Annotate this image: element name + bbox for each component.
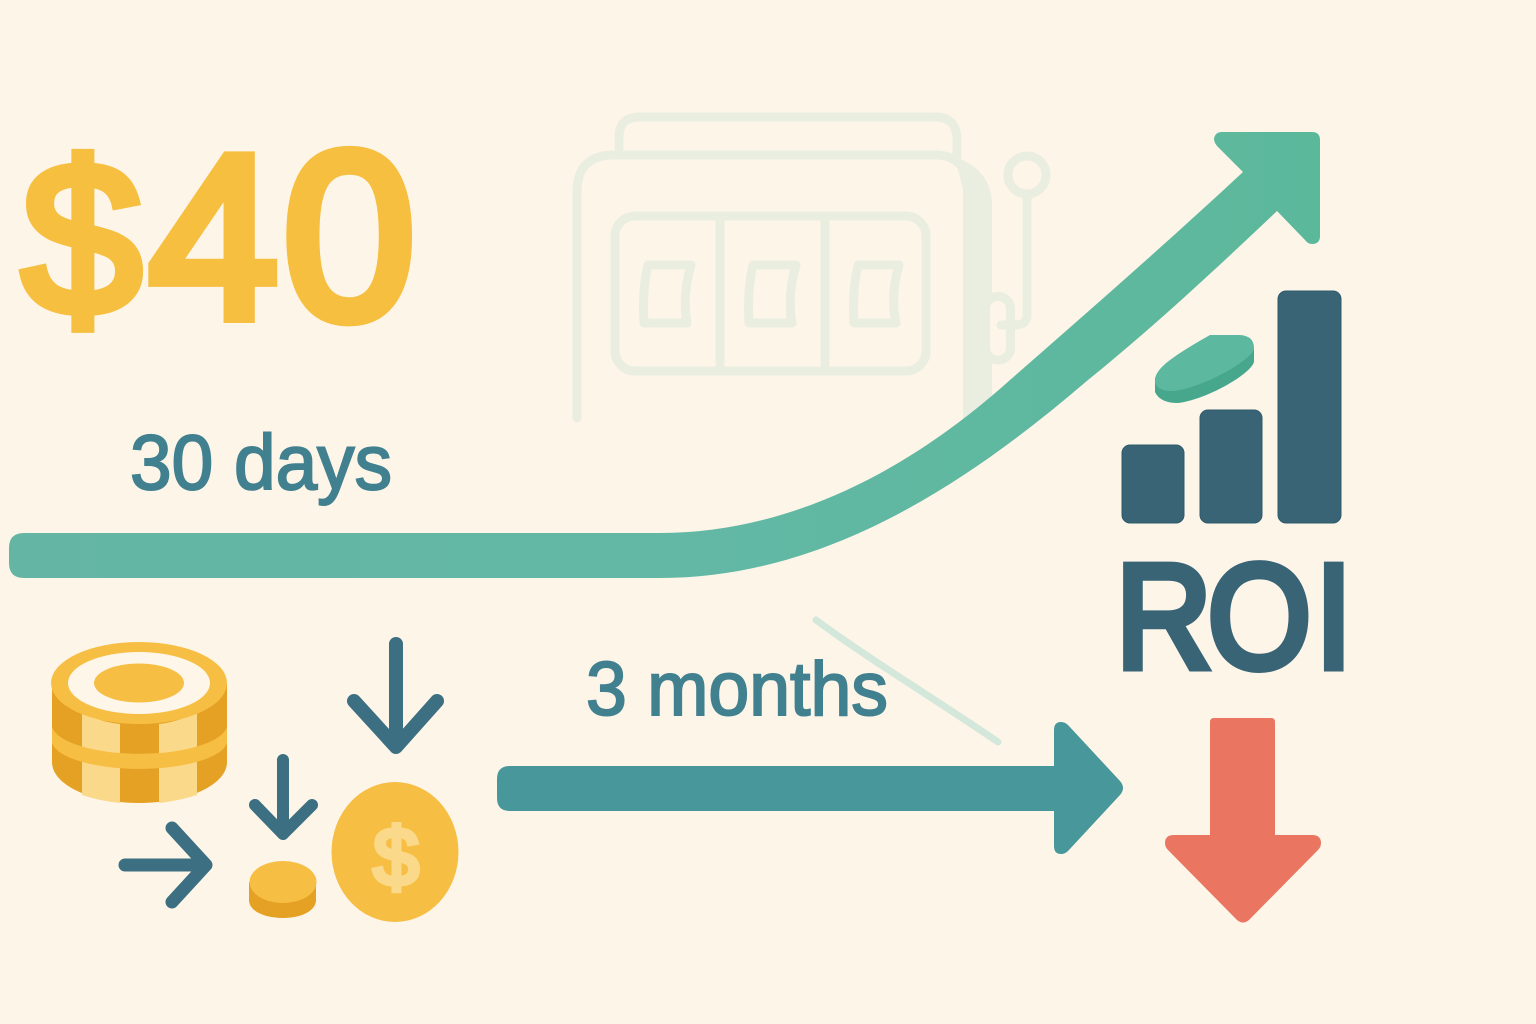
label: ROI: R <box>1116 534 1212 699</box>
arrow: large down arrow <box>354 644 437 747</box>
arrow: small down arrow <box>255 760 312 834</box>
icon: dollar coin: $ <box>373 812 419 903</box>
heading: $40: $ <box>22 118 142 359</box>
arrow: red down arrow <box>1165 718 1321 922</box>
icon: chip stack <box>51 642 227 803</box>
chip middle band <box>52 727 227 769</box>
icon: small coin <box>249 861 316 918</box>
label: 3 months: 3 months <box>586 647 888 732</box>
heading: $40: 4 <box>149 108 278 367</box>
arrow: flat three-month arrow <box>497 722 1123 854</box>
icon: dollar coin <box>332 782 458 922</box>
arrow: small right arrow <box>125 828 206 902</box>
decorative pen stroke behind 3 months <box>816 620 998 742</box>
label: 30 days: 30 days <box>130 418 392 506</box>
label: ROI: I <box>1315 534 1352 699</box>
bar chart: rising bars <box>1122 291 1341 523</box>
label: ROI: O <box>1208 534 1311 699</box>
icon: faint slot machine <box>577 117 1046 440</box>
icon: green tilted chip <box>1155 335 1254 403</box>
arrow: rising growth curve <box>9 132 1320 578</box>
heading: $40: 0 <box>283 104 415 369</box>
chip top face <box>51 642 227 724</box>
chip light stripes <box>82 712 197 803</box>
